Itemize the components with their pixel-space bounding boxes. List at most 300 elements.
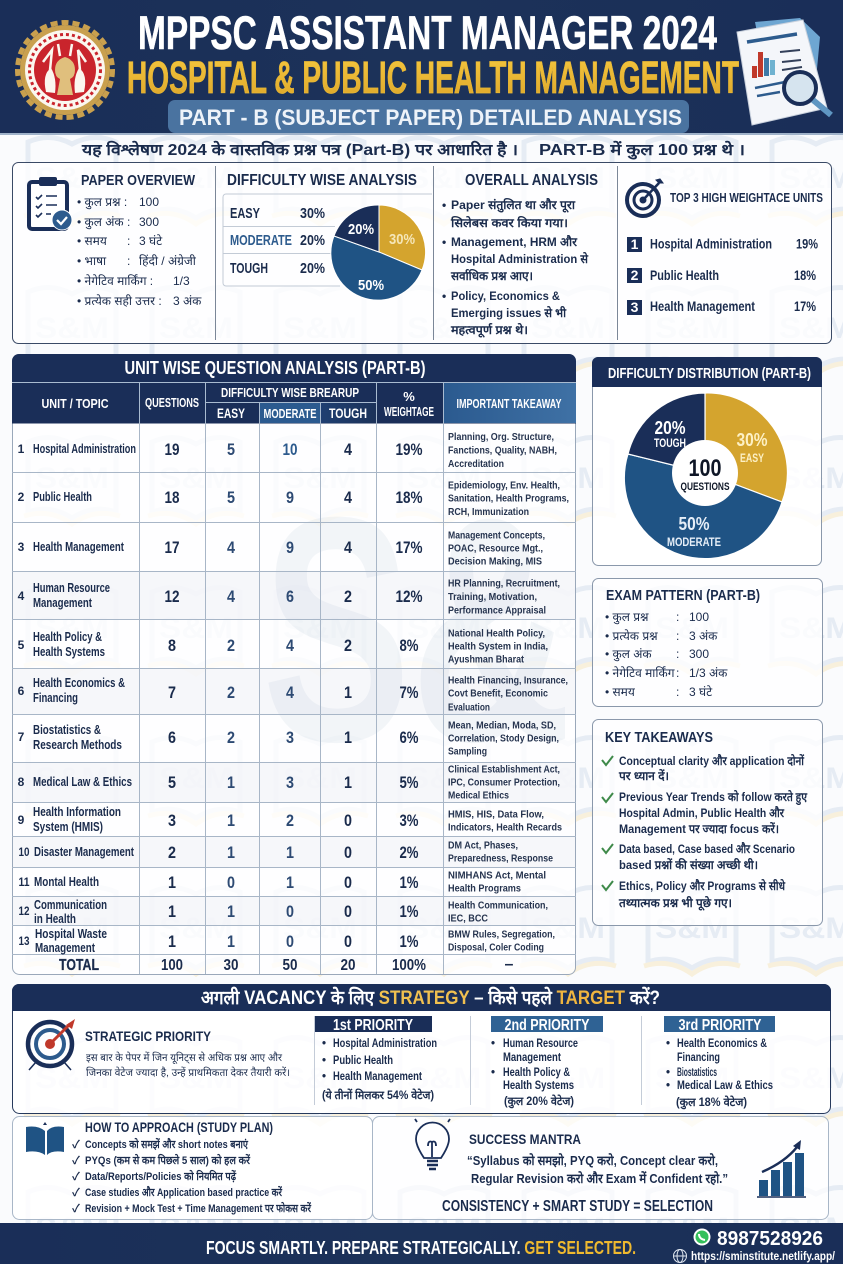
- bullet list: सिलेबस कवर किया गया।: [450, 216, 568, 230]
- row 12: 0: [344, 902, 352, 921]
- 1st priority: •: [322, 1055, 326, 1067]
- row 13: Disposal, Coler Coding: [448, 942, 544, 954]
- takeaway text: पर ध्यान दें।: [618, 769, 669, 783]
- panel: top 3 units: [627, 179, 823, 315]
- row 10: 1: [227, 843, 235, 862]
- row 12: 0: [286, 902, 294, 921]
- donut chart: 20%: [654, 418, 686, 438]
- donut chart: 30%: [736, 430, 768, 450]
- row 3: 17%: [396, 538, 422, 557]
- strategic priority text: इस बार के पेपर में जिन यूनिट्स से अधिक प्रश्न आए और: [86, 1051, 283, 1064]
- table header: QUESTIONS: [145, 396, 199, 410]
- quote: [467, 1153, 728, 1186]
- row 3: Health Management: [33, 540, 125, 554]
- donut chart: QUESTIONS: [680, 481, 730, 493]
- phone number: 8987528926: [717, 1228, 823, 1250]
- row 12: [18, 898, 548, 926]
- plan list: PYQs (कम से कम पिछले 5 साल) को हल करें: [85, 1153, 251, 1167]
- row 6: 4: [286, 683, 294, 702]
- row 13: Management: [35, 941, 96, 955]
- heading: KEY TAKEAWAYS: [605, 729, 713, 746]
- row 8: [18, 764, 560, 802]
- subtitle pill: PART - B (SUBJECT PAPER) DETAILED ANALYSIS: [179, 105, 682, 130]
- row 12: in Health: [34, 912, 76, 926]
- row 7: Sampling: [448, 746, 487, 758]
- difficulty table: MODERATE: [230, 232, 292, 249]
- icon: clipboard: [29, 177, 72, 230]
- 3rd priority: •: [666, 1080, 670, 1092]
- rank rows: 1: [631, 236, 639, 252]
- intro line: [81, 140, 745, 160]
- heading: EXAM PATTERN (PART-B): [606, 587, 760, 604]
- 3rd priority: •: [666, 1067, 670, 1079]
- row 4: Management: [33, 596, 93, 610]
- table header: %: [403, 389, 415, 404]
- 2nd priority: 2nd PRIORITY: [504, 1017, 590, 1034]
- strategy heading bar: अगली VACANCY के लिए STRATEGY – किसे पहले TARGET करें?: [201, 986, 660, 1009]
- row 11: 11: [18, 875, 30, 889]
- row 2: 18: [164, 488, 180, 507]
- difficulty table: TOUGH: [230, 260, 268, 277]
- row 3: 4: [344, 538, 352, 557]
- icon: globe: [674, 1250, 686, 1262]
- row 13: 13: [18, 934, 30, 948]
- panel: unit wise table: [12, 354, 576, 974]
- heading: PAPER OVERVIEW: [81, 172, 196, 189]
- 1st priority: Public Health: [333, 1055, 393, 1067]
- row 11: 0: [227, 873, 235, 892]
- row 1: 5: [227, 440, 235, 459]
- 1st priority: 1st PRIORITY: [333, 1017, 413, 1034]
- 3rd priority: Medical Law & Ethics: [677, 1080, 773, 1092]
- row 7: Biostatistics &: [33, 723, 101, 737]
- row 5: 8: [168, 636, 176, 655]
- 1st priority: (ये तीनों मिलकर 54% वेटेज): [322, 1088, 434, 1102]
- strategy heading bar: [12, 984, 831, 1011]
- difficulty table: [223, 194, 432, 286]
- row 8: 3: [286, 773, 294, 792]
- bullet list: •: [442, 198, 446, 212]
- panel: how to approach: [12, 1116, 372, 1220]
- rank rows: Hospital Administration: [650, 236, 772, 252]
- takeaway text: based प्रश्नों की संख्या अच्छी थी।: [619, 858, 758, 872]
- bullet list: Policy, Economics &: [451, 289, 560, 303]
- row 2: 4: [344, 488, 352, 507]
- bullet list: Management, HRM और: [451, 235, 578, 249]
- row 10: Preparedness, Response: [448, 852, 553, 864]
- row 11: NIMHANS Act, Mental: [448, 870, 546, 882]
- row 7: 7: [18, 730, 25, 744]
- exam list: :: [676, 629, 679, 643]
- difficulty table: EASY: [230, 205, 260, 222]
- row 8: Clinical Establishment Act,: [448, 764, 560, 776]
- total row: –: [505, 956, 514, 973]
- icon: whatsapp: [694, 1228, 710, 1246]
- row 9: 3%: [400, 811, 418, 830]
- list: 3 अंक: [173, 294, 202, 308]
- row 6: Financing: [33, 691, 78, 705]
- plan list: Case studies और Application based practice करें: [85, 1185, 283, 1199]
- intro line: PART-B में कुल 100 प्रश्न थे ।: [539, 140, 745, 160]
- list: 1/3: [173, 274, 190, 288]
- icon: report with magnifier: [737, 18, 831, 125]
- row 4: 12: [164, 587, 180, 606]
- exam list: • कुल अंक: [605, 647, 652, 662]
- plan list: ✓: [72, 1139, 80, 1151]
- panel: difficulty wise analysis: [223, 172, 432, 300]
- row 9: 3: [168, 811, 176, 830]
- icon: target: [627, 179, 663, 216]
- takeaway text: Ethics, Policy और Programs से सीधे: [619, 879, 786, 893]
- difficulty table: 20%: [300, 232, 325, 249]
- row 7: 6: [168, 728, 176, 747]
- table header: TOUGH: [329, 405, 367, 421]
- exam list: 1/3 अंक: [689, 666, 728, 680]
- table title bar: UNIT WISE QUESTION ANALYSIS (PART-B): [124, 358, 426, 378]
- exam list: 300: [689, 647, 709, 661]
- bullet list: Paper संतुलित था और पूरा: [451, 198, 576, 213]
- strategic priority text: [85, 1028, 290, 1079]
- row 7: 6%: [400, 728, 418, 747]
- table header: WEIGHTAGE: [384, 405, 434, 419]
- icon: light bulb: [415, 1119, 450, 1169]
- row 13: 0: [344, 932, 352, 951]
- row 5: Health Policy &: [33, 630, 102, 644]
- row 13: BMW Rules, Segregation,: [448, 928, 555, 940]
- icon: open book: [26, 1122, 64, 1155]
- row 13: 1: [227, 932, 235, 951]
- row 2: RCH, Immunization: [448, 506, 529, 518]
- list: • समय: [77, 234, 108, 248]
- row 10: [18, 840, 553, 864]
- row 7: Correlation, Stody Design,: [448, 732, 559, 744]
- heading: HOW TO APPROACH (STUDY PLAN): [85, 1119, 273, 1135]
- row 2: Public Health: [33, 490, 92, 504]
- list: 100: [139, 195, 159, 209]
- table header: UNIT / TOPIC: [42, 396, 109, 411]
- row 11: Montal Health: [34, 875, 99, 889]
- table header: IMPORTANT TAKEAWAY: [456, 397, 562, 411]
- row 5: Ayushman Bharat: [448, 654, 524, 666]
- list: • नेगेटिव मार्किंग :: [77, 274, 153, 288]
- 3rd priority: (कुल 18% वेटेज): [676, 1095, 747, 1110]
- total row: TOTAL: [59, 957, 99, 974]
- row 11: 1: [286, 873, 294, 892]
- row 11: 1%: [400, 873, 418, 892]
- 2nd priority: Human Resource: [503, 1038, 578, 1050]
- 3rd priority: 3rd PRIORITY: [678, 1017, 762, 1034]
- quote: Regular Revision करो और Exam में Confident रहो.”: [471, 1171, 728, 1186]
- row 9: HMIS, HIS, Data Flow,: [448, 808, 544, 820]
- row 13: Hospital Waste: [35, 927, 107, 941]
- row 5: 5: [18, 638, 25, 652]
- pie chart: 50%: [358, 277, 384, 294]
- row 10: 2: [168, 843, 176, 862]
- row 2: Epidemiology, Env. Health,: [448, 480, 560, 492]
- row 5: 2: [227, 636, 235, 655]
- plan list: ✓: [72, 1203, 80, 1215]
- exam list: :: [676, 685, 679, 699]
- rank rows: [627, 236, 818, 315]
- row 13: 1%: [400, 932, 418, 951]
- row 12: Health Communication,: [448, 900, 548, 912]
- row 6: 7%: [400, 683, 418, 702]
- footer slogan: FOCUS SMARTLY. PREPARE STRATEGICALLY. GET SELECTED.: [206, 1238, 636, 1258]
- panel: success mantra: [372, 1116, 828, 1220]
- bullet list: Emerging issues से भी: [451, 306, 567, 320]
- row 8: Medical Law & Ethics: [33, 775, 132, 789]
- exam list: [605, 610, 728, 699]
- row 12: 1%: [400, 902, 418, 921]
- row 5: 4: [286, 636, 294, 655]
- 3rd priority: Biostatistics: [677, 1067, 717, 1079]
- takeaway text: Previous Year Trends को follow करते हुए: [619, 790, 808, 806]
- exam list: • नेगेटिव मार्किंग: [605, 666, 675, 680]
- row 12: 1: [168, 902, 176, 921]
- row 9: 2: [286, 811, 294, 830]
- donut chart: EASY: [740, 451, 764, 465]
- 2nd priority: (कुल 20% वेटेज): [504, 1094, 574, 1109]
- rank rows: 2: [631, 267, 639, 283]
- panel: exam pattern: [592, 578, 822, 706]
- row 13: [18, 927, 555, 955]
- row 7: 2: [227, 728, 235, 747]
- row 8: 1: [344, 773, 352, 792]
- heading: SUCCESS MANTRA: [469, 1131, 581, 1147]
- row 4: Training, Motivation,: [448, 591, 537, 603]
- pie chart: [331, 205, 426, 300]
- list: 3 घंटे: [139, 234, 163, 248]
- row 4: Performance Appraisal: [448, 604, 546, 616]
- icon: state seal: [18, 22, 112, 118]
- row 12: IEC, BCC: [448, 912, 488, 924]
- 2nd priority: Health Systems: [503, 1080, 574, 1092]
- row 7: [18, 720, 559, 758]
- takeaway text: [618, 754, 808, 911]
- list: • भाषा: [77, 254, 107, 268]
- row 9: Indicators, Health Recards: [448, 822, 562, 834]
- exam list: • प्रत्येक प्रश्न: [605, 629, 658, 643]
- quote: “Syllabus को समझो, PYQ करो, Concept clear करो,: [467, 1153, 718, 1168]
- list: हिंदी / अंग्रेजी: [139, 254, 197, 268]
- row 5: 8%: [400, 636, 418, 655]
- exam list: 100: [689, 610, 709, 624]
- row 6: 6: [18, 684, 25, 698]
- panel: key takeaways: [592, 720, 822, 926]
- bullet list: महत्वपूर्ण प्रश्न थे।: [450, 323, 528, 338]
- 1st priority: [315, 1016, 437, 1102]
- row 3: [18, 530, 545, 568]
- icon: target with arrow: [28, 1019, 75, 1070]
- row 6: [18, 674, 568, 714]
- row 1: Hospital Administration: [33, 442, 136, 456]
- 2nd priority: •: [491, 1038, 495, 1050]
- row 1: 1: [18, 442, 25, 456]
- row 5: 2: [344, 636, 352, 655]
- rank rows: 17%: [794, 298, 816, 314]
- row 1: 10: [282, 440, 298, 459]
- 3rd priority: Health Economics &: [677, 1038, 767, 1050]
- row 9: 1: [227, 811, 235, 830]
- exam list: • समय: [605, 685, 636, 699]
- row 6: Covt Benefit, Economic: [448, 688, 548, 700]
- row 6: Health Financing, Insurance,: [448, 674, 568, 686]
- row 3: Decision Making, MIS: [448, 556, 542, 568]
- row 10: 0: [344, 843, 352, 862]
- table title bar: [12, 354, 576, 382]
- row 4: 2: [344, 587, 352, 606]
- row 9: System (HMIS): [33, 820, 103, 834]
- list: 300: [139, 215, 159, 229]
- total row: 30: [224, 957, 239, 974]
- rank rows: 3: [631, 299, 639, 315]
- row 2: 18%: [396, 488, 422, 507]
- row 3: 4: [227, 538, 235, 557]
- row 6: 1: [344, 683, 352, 702]
- 1st priority: Hospital Administration: [333, 1038, 437, 1050]
- alternate row shading: [13, 571, 575, 925]
- row 1: [18, 431, 557, 470]
- row 1: 19%: [396, 440, 422, 459]
- row 10: DM Act, Phases,: [448, 840, 518, 852]
- table grid: [12, 423, 576, 974]
- row 4: HR Planning, Recruitment,: [448, 578, 560, 590]
- takeaway text: Management पर ज्यादा focus करें।: [619, 822, 779, 836]
- difficulty table: 30%: [300, 205, 325, 222]
- donut chart: MODERATE: [667, 535, 721, 549]
- row 5: National Health Policy,: [448, 628, 545, 640]
- exam list: 3 घंटे: [689, 685, 713, 699]
- list: • प्रत्येक सही उत्तर :: [77, 294, 162, 308]
- total row: 100%: [392, 957, 426, 974]
- row 4: 4: [227, 587, 235, 606]
- row 12: 12: [18, 904, 30, 918]
- plan list: ✓: [72, 1187, 80, 1199]
- 3rd priority: Financing: [677, 1052, 720, 1064]
- bullet list: Hospital Administration से: [451, 252, 589, 266]
- row 10: Disaster Management: [34, 845, 135, 859]
- row 1: 19: [164, 440, 180, 459]
- takeaway text: Data based, Case based और Scenario: [619, 842, 795, 856]
- row 1: Accreditation: [448, 458, 504, 470]
- row 8: 5: [168, 773, 176, 792]
- 1st priority: •: [322, 1038, 326, 1050]
- total row: 100: [161, 957, 183, 974]
- panel: overview strip: [12, 162, 832, 344]
- panel: overall analysis: [442, 172, 598, 338]
- formula: CONSISTENCY + SMART STUDY = SELECTION: [442, 1198, 713, 1215]
- list: [77, 195, 202, 308]
- heading: OVERALL ANALYSIS: [465, 172, 598, 189]
- row 3: POAC, Resource Mgt.,: [448, 542, 543, 554]
- row 4: 4: [18, 589, 25, 603]
- donut chart: 100: [688, 455, 722, 482]
- total row: 20: [340, 957, 356, 974]
- table header: DIFFICULTY WISE BREARUP: [221, 386, 359, 400]
- 3rd priority: [664, 1016, 775, 1110]
- big watermark: S&: [262, 450, 572, 808]
- row 4: 12%: [396, 587, 422, 606]
- total row: [59, 956, 514, 974]
- row 6: Evaluation: [448, 702, 490, 714]
- row 10: 2%: [400, 843, 418, 862]
- row 4: 6: [286, 587, 294, 606]
- row 13: 0: [286, 932, 294, 951]
- table header: EASY: [217, 405, 245, 421]
- list: • कुल प्रश्न :: [77, 195, 127, 210]
- row 8: 8: [18, 775, 25, 789]
- pie chart: 20%: [348, 221, 374, 238]
- row 8: 1: [227, 773, 235, 792]
- rank rows: Health Management: [650, 298, 755, 314]
- takeaway text: Conceptual clarity और application दोनों: [619, 754, 805, 768]
- row 1: Planning, Org. Structure,: [448, 431, 554, 443]
- row 11: 0: [344, 873, 352, 892]
- row 3: 3: [18, 540, 25, 554]
- row 5: Health Systems: [33, 645, 105, 659]
- strategic priority text: जिनका वेटेज ज्यादा है, उन्हें प्राथमिकता देकर तैयारी करें।: [86, 1066, 290, 1079]
- icon: growth chart: [757, 1140, 806, 1197]
- plan list: ✓: [72, 1171, 80, 1183]
- plan list: Revision + Mock Test + Time Management पर फोकस करें: [85, 1201, 312, 1215]
- 3rd priority: •: [666, 1038, 670, 1050]
- 2nd priority: •: [491, 1067, 495, 1079]
- row 8: 5%: [400, 773, 418, 792]
- row 5: [18, 628, 548, 666]
- row 4: Human Resource: [33, 581, 110, 595]
- row 8: Medical Ethics: [448, 790, 509, 802]
- difficulty table: 20%: [300, 260, 325, 277]
- plan list: [72, 1137, 312, 1215]
- row 11: [18, 870, 546, 894]
- panel heading: [592, 357, 822, 387]
- list: • कुल अंक :: [77, 215, 130, 230]
- row 12: Communication: [34, 898, 107, 912]
- bullet list: •: [442, 289, 446, 303]
- row 6: 7: [168, 683, 176, 702]
- 2nd priority: Management: [503, 1052, 561, 1064]
- row 11: 1: [168, 873, 176, 892]
- exam list: :: [676, 666, 679, 680]
- bullet list: सर्वाधिक प्रश्न आए।: [450, 269, 533, 283]
- donut chart: TOUGH: [654, 436, 686, 450]
- 2nd priority: Health Policy &: [503, 1067, 570, 1079]
- plan list: Concepts को समझें और short notes बनाएं: [85, 1137, 249, 1151]
- row 12: 1: [227, 902, 235, 921]
- exam list: :: [676, 610, 679, 624]
- row 6: Health Economics &: [33, 676, 125, 690]
- takeaway text: Hospital Admin, Public Health और: [619, 806, 785, 820]
- list: :: [127, 254, 130, 268]
- table header: [12, 382, 576, 424]
- row 7: Research Methods: [33, 738, 122, 752]
- row 5: Health System in India,: [448, 640, 548, 652]
- header banner: [0, 0, 843, 135]
- check icons: [602, 756, 613, 890]
- row 9: 9: [18, 813, 25, 827]
- table header: MODERATE: [264, 407, 316, 421]
- 2nd priority: [491, 1016, 603, 1109]
- rank rows: 19%: [796, 236, 818, 252]
- row 9: [18, 805, 562, 834]
- intro line: यह विश्लेषण 2024 के वास्तविक प्रश्न पत्र (Part-B) पर आधारित है ।: [81, 140, 518, 159]
- row 13: 1: [168, 932, 176, 951]
- row 2: 5: [227, 488, 235, 507]
- row 6: 2: [227, 683, 235, 702]
- row 10: 10: [18, 845, 30, 859]
- rank rows: Public Health: [650, 267, 719, 283]
- row 3: 9: [286, 538, 294, 557]
